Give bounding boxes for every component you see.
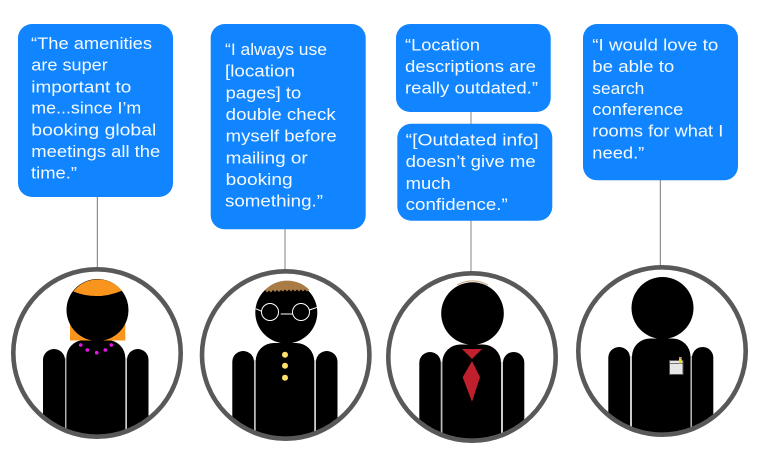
persona 3: man with red tie	[388, 273, 556, 454]
hair	[265, 281, 310, 292]
quote text: amenities: meetings all the	[31, 143, 160, 161]
quote text: confidence	[406, 132, 539, 214]
quote text: conference rooms: need.”	[592, 144, 644, 162]
connector: persona 2	[284, 229, 286, 270]
pocket with pencil	[670, 357, 683, 374]
quote text: confidence: much	[406, 175, 451, 193]
quote text: amenities	[31, 35, 160, 182]
quote text: confidence: confidence.”	[406, 196, 508, 214]
figure body and arms	[232, 343, 338, 436]
quote text: amenities: important to	[31, 78, 131, 96]
quote text: location pages: something.”	[225, 193, 323, 211]
persona 4: person with shirt pocket and pencil	[578, 267, 746, 448]
quote text: amenities: me...since I’m	[31, 100, 141, 118]
quote text: conference rooms	[592, 37, 723, 162]
head	[632, 277, 694, 339]
quote text: confidence: “[Outdated info]	[406, 132, 539, 150]
quote text: outdated descriptions	[405, 37, 538, 98]
glasses	[256, 304, 317, 320]
quote text: location pages	[225, 41, 337, 211]
quote text: amenities: “The amenities	[31, 35, 152, 53]
quote text: amenities: time.”	[31, 164, 77, 182]
head	[441, 282, 504, 345]
quote text: conference rooms: be able to	[592, 58, 674, 76]
quote bubble: confidence	[397, 124, 552, 221]
quote text: location pages: myself before	[226, 128, 337, 146]
head	[255, 282, 317, 344]
quote text: location pages: [location	[225, 63, 295, 81]
connector: persona 1	[96, 196, 98, 268]
quote text: conference rooms: search	[592, 80, 644, 98]
ring	[202, 271, 369, 439]
head	[66, 279, 128, 341]
quote bubble: conference rooms	[583, 24, 738, 180]
hair back	[70, 315, 125, 340]
quote text: amenities: booking global	[31, 122, 156, 140]
figure body and arms	[43, 340, 148, 434]
quote bubble: outdated descriptions	[396, 24, 551, 112]
quote text: location pages: mailing or	[226, 149, 308, 167]
quote text: location pages: “I always use	[225, 41, 327, 59]
quote text: outdated descriptions: really outdated.”	[405, 80, 538, 98]
persona 1: woman with orange hair and necklace	[13, 269, 181, 450]
quote text: location pages: pages] to	[226, 84, 301, 102]
quote text: conference rooms: “I would love to	[592, 37, 718, 55]
connector: persona 3	[470, 111, 472, 272]
buttons	[282, 352, 288, 381]
quote text: confidence: doesn’t give me	[406, 153, 536, 171]
quote text: location pages: booking	[226, 171, 293, 189]
persona 2: man with glasses and buttons	[202, 271, 369, 453]
necklace	[79, 343, 113, 355]
quote bubble: location pages	[211, 24, 366, 229]
quote bubble: amenities	[18, 24, 173, 197]
connector: persona 4	[659, 180, 661, 266]
ring	[578, 267, 746, 435]
hair top	[73, 279, 122, 296]
ring	[13, 269, 181, 437]
quote text: conference rooms: rooms for what I	[592, 123, 723, 141]
quote text: outdated descriptions: descriptions are	[405, 58, 536, 76]
quote text: amenities: are super	[31, 57, 108, 75]
figure body and arms	[608, 338, 714, 432]
quote text: location pages: double check	[226, 106, 337, 124]
figure body and arms	[419, 344, 524, 438]
quote text: conference rooms: conference	[592, 101, 683, 119]
tie	[462, 349, 482, 402]
ring	[388, 273, 556, 441]
hair rim	[457, 281, 488, 285]
quote text: outdated descriptions: “Location	[405, 37, 480, 55]
